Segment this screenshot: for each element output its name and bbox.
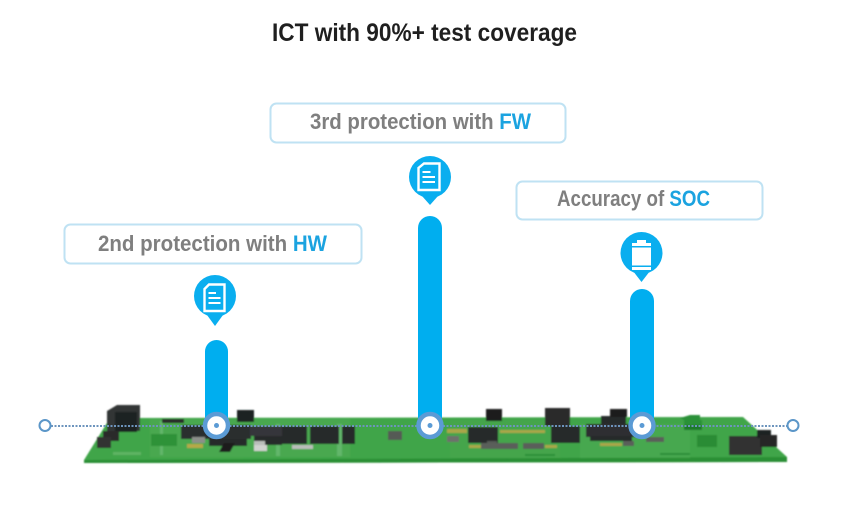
title: ICT with 90%+ test coverage (272, 19, 577, 47)
bar FW (418, 216, 442, 428)
label box FW: 3rd protection with FW (310, 109, 531, 134)
dotted axis line (51, 425, 787, 427)
label box HW (64, 224, 362, 264)
label box SOC (516, 182, 762, 220)
left end marker (40, 420, 50, 431)
column: 2nd protection with HW (64, 224, 362, 437)
node SOC (630, 414, 654, 437)
small light components left (187, 437, 313, 451)
label box SOC: Accuracy of SOC (557, 186, 710, 211)
right chip group (586, 409, 664, 446)
yellow solder row (447, 429, 622, 448)
icon: document pin HW (194, 275, 236, 326)
icon: battery pin SOC (620, 232, 662, 282)
node HW (205, 414, 228, 437)
green terminal block (680, 415, 717, 447)
right end marker (788, 420, 798, 431)
label box FW (270, 104, 566, 142)
icon: document pin FW (409, 156, 451, 205)
green block (151, 434, 177, 446)
label box HW: 2nd protection with HW (98, 231, 327, 256)
left connector and chips (97, 405, 184, 448)
board body (84, 417, 787, 463)
main chip row left (181, 410, 355, 452)
bar SOC (630, 289, 654, 428)
right black connector (729, 430, 777, 455)
circuit board (84, 405, 787, 463)
center components (388, 408, 580, 449)
column: 3rd protection with FW (270, 104, 566, 437)
bar HW (205, 340, 228, 428)
node FW (418, 414, 442, 437)
column: Accuracy of SOC (516, 182, 762, 437)
